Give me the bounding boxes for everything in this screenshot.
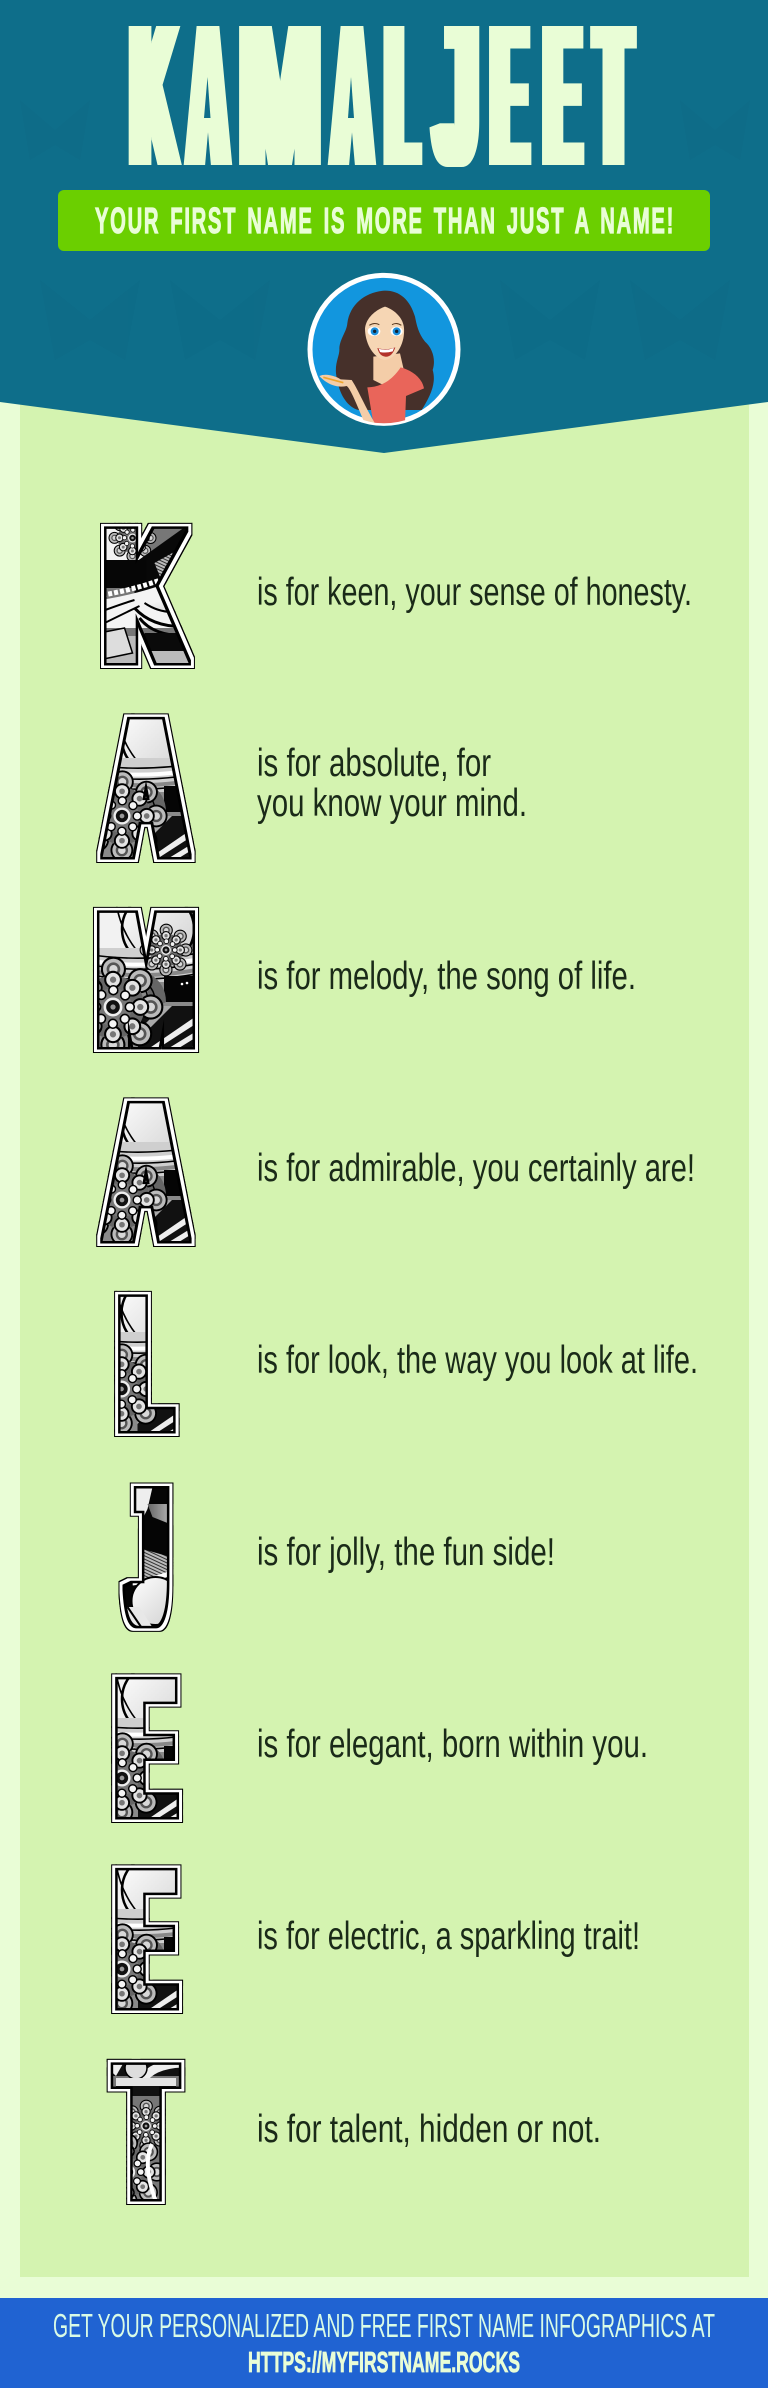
K letterform: K [106, 488, 183, 705]
E letterform: E [119, 1637, 173, 1860]
footer band [0, 2298, 768, 2388]
description E: is for electric, a sparkling trait! [257, 1915, 640, 1958]
K artwork [84, 513, 204, 668]
description A: is for absolute, for [257, 742, 491, 785]
E artwork [86, 1854, 216, 2018]
letter M [92, 906, 200, 1053]
A letterform: A [107, 1062, 185, 1285]
description E: is for elegant, born within you. [257, 1723, 648, 1766]
E letterform: E [119, 1828, 173, 2051]
letter J [88, 1445, 208, 1666]
J artwork [88, 1474, 208, 1629]
description A [257, 742, 527, 825]
description J: is for jolly, the fun side! [257, 1531, 555, 1574]
E artwork [86, 1663, 216, 1827]
M letterform: M [99, 871, 193, 1089]
letter L [86, 1255, 216, 1473]
letter K [84, 488, 204, 705]
letter E [86, 1828, 216, 2051]
panel: letter list [20, 395, 749, 2277]
description M: is for melody, the song of life. [257, 955, 636, 998]
T artwork [86, 2054, 206, 2204]
letter E [86, 1637, 216, 1860]
M artwork [92, 906, 200, 1053]
letter T [86, 2024, 206, 2242]
letter A [86, 678, 216, 901]
header banner [0, 0, 768, 453]
tagline bar [58, 190, 710, 251]
L artwork [86, 1277, 216, 1441]
A artwork [86, 1087, 216, 1251]
letter A [86, 1062, 216, 1285]
title [132, 0, 630, 209]
A artwork [86, 703, 216, 867]
footer line 2: HTTPS://MYFIRSTNAME.ROCKS [248, 2347, 520, 2379]
icon: cartoon woman portrait [310, 275, 458, 423]
L letterform: L [123, 1255, 168, 1473]
J letterform: J [131, 1445, 164, 1666]
A letterform: A [107, 678, 185, 901]
T letterform: T [119, 2024, 173, 2242]
description T: is for talent, hidden or not. [257, 2108, 601, 2151]
description A: you know your mind. [257, 782, 527, 825]
